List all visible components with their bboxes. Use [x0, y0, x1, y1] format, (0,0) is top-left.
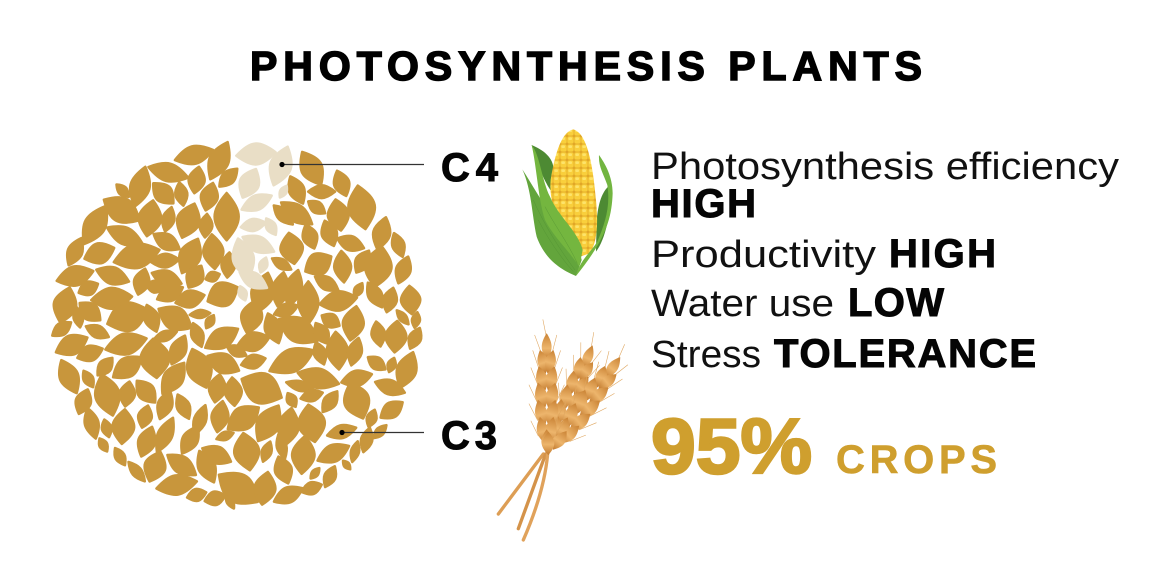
stat label: crops: CROPS [836, 438, 997, 482]
label: C3: C3 [441, 414, 497, 458]
text block: properties [651, 146, 1119, 376]
line: stress: Stress [651, 334, 761, 376]
icon: corn [522, 129, 613, 276]
icon: wheat [498, 319, 644, 540]
line: photosynthesis efficiency: Photosynthesis efficiency [651, 146, 1119, 188]
leaves: C3 share [49, 138, 425, 514]
value: high: HIGH [889, 232, 996, 276]
stems [498, 454, 548, 540]
line: water use: Water use [651, 283, 834, 325]
label: C4: C4 [441, 146, 499, 190]
value: tolerance: TOLERANCE [774, 332, 1036, 376]
line: high: HIGH [651, 182, 756, 226]
leaves: C4 share [228, 142, 297, 302]
chart: leaf circle [49, 138, 425, 514]
value: low: LOW [848, 281, 944, 325]
stat: 95%: 95% [651, 402, 812, 490]
leader line: C4 [279, 162, 424, 167]
line: productivity: Productivity [651, 234, 876, 276]
leader line: C3 [339, 430, 424, 435]
title: PHOTOSYNTHESIS PLANTS [250, 43, 922, 89]
